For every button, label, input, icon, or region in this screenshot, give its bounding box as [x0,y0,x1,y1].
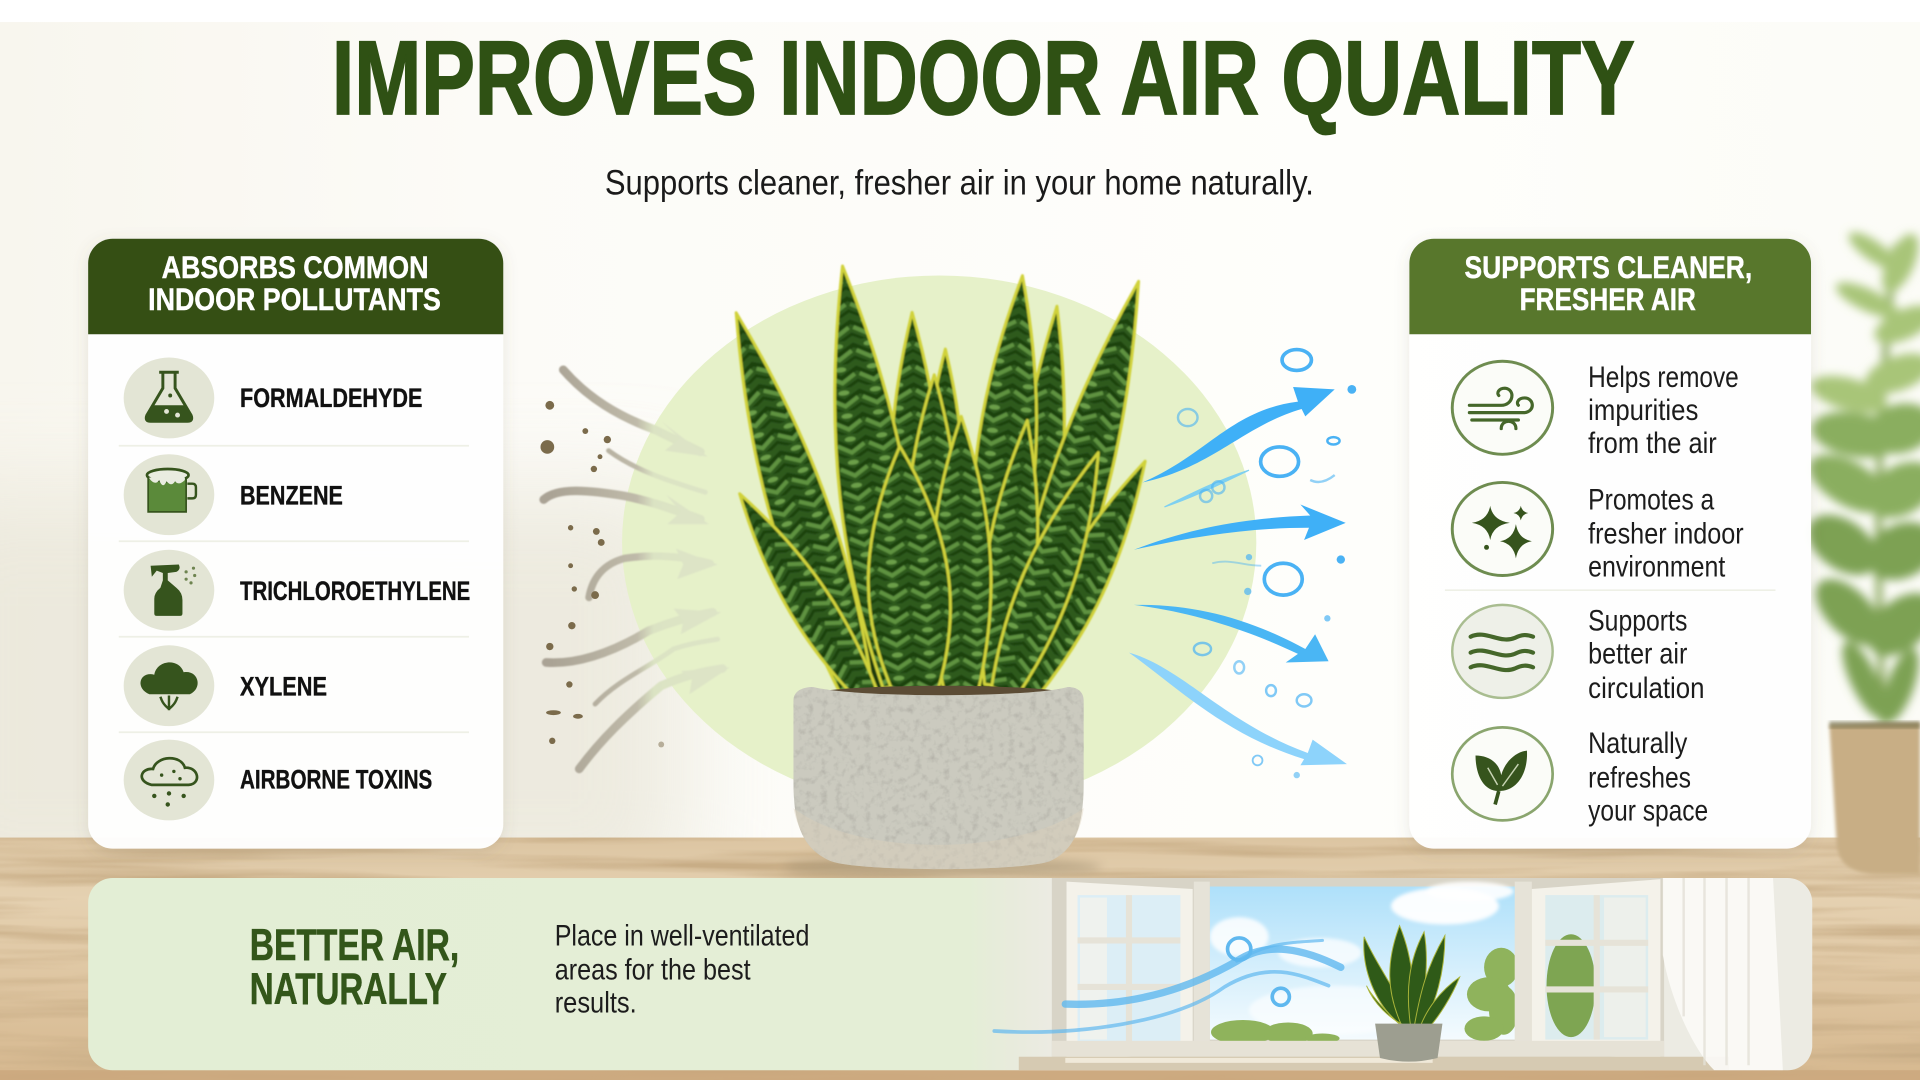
airflow swirl [994,938,1341,1032]
item: formaldehyde [124,358,422,438]
item: xylene: XYLENE [240,672,327,702]
curtain [1663,878,1783,1070]
benefit: refreshes space: Naturally [1588,727,1688,760]
item: benzene: BENZENE [240,480,343,510]
benefit: air circulation: Supports [1588,605,1687,638]
item: xylene [124,645,327,726]
benefit: fresher environment: environment [1588,551,1725,584]
benefit: refreshes space: your space [1588,794,1708,827]
panel: absorbs common indoor pollutants [88,239,503,849]
pollutant air arrows flowing in [540,370,730,769]
benefit: fresher environment: fresher indoor [1588,518,1744,551]
benefit: air circulation: better air [1588,638,1688,671]
item: trichloroethylene: TRICHLOROETHYLENE [240,576,470,606]
banner heading: NATURALLY [250,965,447,1014]
concrete pot [784,686,1102,877]
item: airborne toxins: AIRBORNE TOXINS [240,765,432,795]
banner heading: BETTER AIR, [250,921,459,970]
benefit: removes impurities: from the air [1588,427,1717,460]
fresh air arrows flowing out [1129,350,1356,778]
panel header [1409,239,1811,334]
banner heading [250,921,459,1014]
left window pane [1067,882,1193,1063]
blurred background plant [1797,226,1920,874]
item: airborne toxins [124,740,432,820]
banner tip text [555,919,809,1020]
item: trichloroethylene [124,550,470,631]
benefit: refreshes space [1452,727,1708,827]
item: formaldehyde: FORMALDEHYDE [240,383,422,413]
banner tip text: results. [555,987,637,1020]
benefit: fresher environment [1452,482,1744,584]
benefit: air circulation: circulation [1588,672,1704,705]
small snake plant on sill [1364,926,1460,1062]
benefit: air circulation [1452,605,1704,705]
benefit: removes impurities: Helps remove [1588,361,1739,394]
benefit: refreshes space: refreshes [1588,761,1691,794]
panel: supports cleaner, fresher air [1409,239,1811,849]
green circle behind plant [622,276,1256,809]
banner tip text: Place in well-ventilated [555,919,809,952]
banner tip text: areas for the best [555,954,751,987]
panel header [88,239,503,334]
panel header: FRESHER AIR [1520,281,1696,317]
snake plant [708,261,1167,706]
panel header: INDOOR POLLUTANTS [148,281,441,317]
right window pane [1532,879,1660,1060]
panel header: ABSORBS COMMON [162,249,429,285]
banner: better air, naturally [88,878,1812,1070]
open window illustration [994,878,1783,1070]
benefit: removes impurities [1452,361,1739,460]
item: benzene [124,454,343,535]
panel header: SUPPORTS CLEANER, [1464,249,1752,285]
benefit: removes impurities: impurities [1588,394,1698,427]
benefit: fresher environment: Promotes a [1588,483,1715,516]
subtitle: Supports cleaner, fresher air in your home naturally. [605,163,1314,203]
